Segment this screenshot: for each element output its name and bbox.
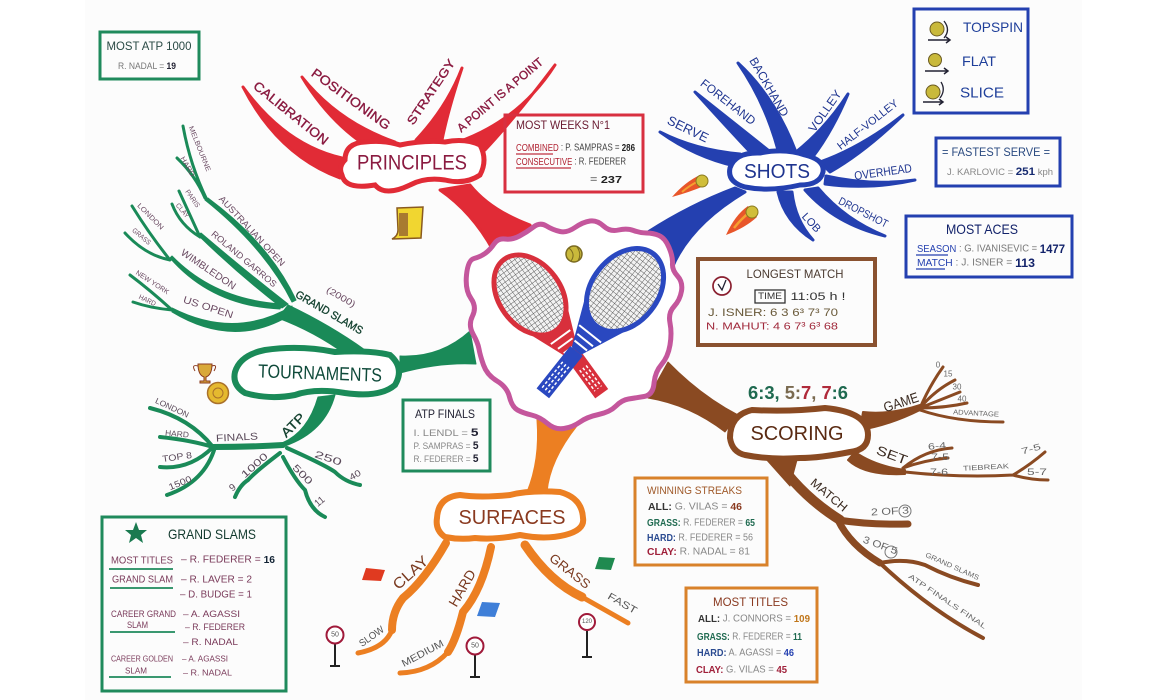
labels: atp branches: 1500 [167, 474, 193, 492]
node: shots: SHOTS [744, 161, 810, 183]
panel: longest match [698, 259, 875, 345]
icon: speed sign 50 medium [466, 638, 484, 677]
labels: surfaces branches: GRASS [546, 550, 594, 592]
labels: scoring branches: 15 [944, 370, 953, 378]
node: surfaces [437, 491, 583, 539]
labels: surfaces branches: HARD [445, 567, 479, 609]
labels: atp branches: 500 [290, 463, 315, 488]
labels: grand slams branches: WIMBLEDON [178, 248, 238, 292]
labels: scoring branches: 2 OF 3 [871, 505, 910, 518]
panel: winning streaks: ALL: G. VILAS = 46 [648, 502, 742, 512]
panel: atp finals: P. SAMPRAS = 5 [414, 440, 478, 452]
panel: winning streaks [635, 478, 767, 565]
green thin branches [125, 126, 360, 517]
panel: most atp 1000 [100, 32, 199, 79]
panel: most aces: MOST ACES [946, 221, 1018, 237]
branch: grass [525, 545, 582, 597]
branch: hard [448, 547, 491, 652]
node: scoring: SCORING [750, 423, 844, 445]
branch: forehand [695, 92, 768, 154]
london and grass [125, 206, 170, 260]
branch: match base [765, 458, 797, 486]
icon: blue racket [517, 233, 679, 414]
labels: grand slams branches: ROLAND GARROS [209, 229, 279, 289]
panel: grand slams: CAREER GOLDEN [111, 654, 173, 664]
melbourne and hard [177, 126, 207, 200]
node: principles: PRINCIPLES [357, 152, 467, 174]
panel: grand slams: – R. NADAL [183, 668, 233, 678]
icon: topspin [928, 21, 950, 43]
panel: grand slams: – R. LAVER = 2 [181, 574, 252, 586]
labels: scoring branches: 5-7 [1027, 467, 1047, 477]
match stem [775, 457, 840, 520]
panel: winning streaks: HARD: R. FEDERER = 56 [647, 532, 753, 544]
branch: serve [660, 132, 740, 166]
icon: gold medal [208, 382, 228, 404]
panel: longest match: TIME [758, 291, 782, 301]
labels: scoring branches: 7-5 [1020, 442, 1042, 456]
labels: scoring branches: 0 [936, 360, 941, 370]
branch: hard tip [400, 652, 448, 673]
trunk: surfaces to center [527, 420, 577, 492]
labels: grand slams branches: PARIS [183, 189, 201, 209]
icon: tennis ball [566, 246, 582, 262]
panel: grand slams: SLAM [125, 666, 147, 676]
branch: clay tip [358, 630, 392, 653]
panel: spin legend: FLAT [962, 53, 996, 69]
panel: most titles: ALL: J. CONNORS = 109 [698, 614, 810, 624]
labels: scoring branches: GAME [881, 389, 921, 415]
branch: us open [172, 306, 292, 332]
finals stem [213, 445, 283, 447]
scoring thin branches [775, 367, 1048, 638]
branch: clay [392, 543, 446, 630]
branch: backhand [738, 63, 796, 152]
branch group: surfaces [358, 420, 628, 673]
panel: winning streaks: WINNING STREAKS [647, 485, 742, 497]
icon: speed sign 120 [579, 614, 595, 657]
labels: shots branches: FOREHAND [698, 76, 759, 128]
new york and hard [130, 275, 172, 310]
branch: roland garros [198, 233, 288, 308]
labels: shots branches: BACKHAND [746, 55, 792, 119]
panel: atp finals: I. LENDL = 5 [414, 427, 478, 439]
labels: shots branches: HALF-VOLLEY [835, 97, 901, 153]
panel: most aces: SEASON : G. IVANISEVIC = 1477 [917, 242, 1065, 256]
2 of 3 [838, 520, 908, 524]
labels: scoring branches: ADVANTAGE [953, 409, 1000, 419]
icon: trophy [194, 364, 216, 383]
icon: speed sign 50 [326, 626, 344, 666]
panel: grand slams: SLAM [127, 620, 148, 630]
panel: most titles: CLAY: G. VILAS = 45 [696, 664, 787, 676]
branch group: principles [243, 65, 555, 250]
labels: grand slams branches: CLAY [174, 202, 190, 220]
panel: longest match: N. MAHUT: 4 6 7³ 6³ 68 [706, 322, 839, 332]
panel: winning streaks: GRASS: R. FEDERER = 65 [647, 518, 755, 528]
labels: grand slams branches: HARD [137, 294, 157, 308]
labels: scoring branches: 3 OF 5 [861, 535, 899, 557]
branch: australian open [205, 198, 296, 302]
trunk: grand slams [278, 305, 365, 354]
labels: scoring branches: 30 [953, 382, 962, 392]
branch: strategy [416, 68, 462, 140]
icon: flaming ball 2 [726, 206, 758, 235]
finals leaves [150, 408, 215, 495]
panel: longest match: 11:05 h ! [790, 291, 846, 303]
branch: positioning [302, 77, 395, 145]
branch: set [848, 452, 905, 474]
panel: most weeks no 1 [505, 115, 643, 192]
labels: grand slams branches: MELBOURNE [187, 125, 211, 173]
labels: grand slams branches: HARD [178, 156, 196, 178]
set leaves [903, 448, 952, 468]
node: principles [341, 141, 484, 191]
labels: scoring branches: SET [874, 442, 910, 468]
panel: most aces: MATCH : J. ISNER = 113 [917, 256, 1035, 270]
labels: grand slams branches: NEW YORK [134, 270, 170, 296]
panel: grand slams: – A. AGASSI [183, 609, 240, 619]
labels: atp branches [154, 396, 363, 509]
labels: atp branches: FINALS [216, 431, 259, 445]
icon: speed sign 120: 120 [582, 619, 593, 625]
panel: most titles [686, 588, 817, 682]
labels: shots branches [665, 55, 913, 235]
panel: grand slams: – D. BUDGE = 1 [180, 590, 252, 600]
labels: scoring branches: GRAND SLAMS [924, 552, 980, 582]
branch: dropshot [805, 188, 885, 236]
labels: scoring branches: TIEBREAK [963, 463, 1010, 473]
branch group: shots [648, 63, 915, 268]
labels: shots branches: SERVE [665, 113, 711, 146]
labels: grand slams branches: (2000) [325, 285, 357, 309]
labels: scoring branches: ATP FINALS FINAL [907, 573, 987, 631]
tiebreak stem [905, 452, 1048, 480]
labels: grand slams branches: LONDON [136, 203, 164, 231]
panel: most weeks no 1: = 237 [590, 174, 623, 186]
panel: most weeks no 1: CONSECUTIVE : R. FEDERER [516, 156, 626, 168]
labels: grand slams branches [130, 125, 365, 337]
labels: atp branches: TOP 8 [161, 450, 193, 464]
labels: surfaces branches: FAST [605, 591, 639, 617]
labels: scoring branches: 40 [958, 394, 967, 404]
game fan [920, 367, 967, 408]
panel: most titles: GRASS: R. FEDERER = 11 [697, 632, 802, 642]
panel: atp finals: R. FEDERER = 5 [414, 453, 479, 465]
trunk: principles to center [440, 185, 530, 250]
icon: slice [923, 82, 943, 105]
panel: grand slams: GRAND SLAM [112, 574, 173, 586]
500 branch [283, 457, 325, 517]
labels: surfaces branches: MEDIUM [400, 638, 446, 670]
branch: overhead [825, 176, 915, 186]
node: surfaces: SURFACES [458, 507, 566, 529]
trunk: atp [282, 395, 335, 446]
icon: flat [925, 54, 948, 74]
branch: game [860, 405, 920, 430]
node: scoring [730, 408, 868, 459]
panel: spin legend: TOPSPIN [963, 19, 1023, 35]
labels: principles branches: POSITIONING [309, 65, 393, 133]
paris and clay [172, 191, 200, 237]
branch: wimbledon [170, 256, 282, 309]
branch: volley [796, 94, 848, 158]
atp finals final leaf [880, 563, 983, 638]
node: tournaments: TOURNAMENTS [258, 361, 382, 387]
icon: star [125, 522, 147, 543]
panel: grand slams: GRAND SLAMS [168, 526, 256, 542]
branch: lob [778, 192, 813, 240]
labels: atp branches: LONDON [154, 396, 190, 420]
panel: grand slams: MOST TITLES [111, 556, 173, 566]
icon: speed sign 50 medium: 50 [471, 642, 479, 650]
panel: most titles: MOST TITLES [713, 595, 788, 609]
panel: grand slams: – R. NADAL [183, 637, 238, 647]
labels: shots branches: OVERHEAD [853, 161, 913, 183]
panel: atp finals [403, 400, 490, 471]
labels: shots branches: VOLLEY [806, 87, 844, 135]
central bubble [466, 221, 682, 429]
grand slams leaf [880, 561, 978, 585]
1000 branch [235, 453, 280, 497]
branch group: scoring [648, 362, 920, 486]
panel: most titles: HARD: A. AGASSI = 46 [697, 648, 794, 658]
labels: atp branches: 9 [227, 482, 239, 494]
panel: grand slams [102, 517, 286, 691]
labels: grand slams branches: GRASS [130, 227, 152, 247]
labels: atp branches: 1000 [239, 451, 271, 481]
panel: longest match: LONGEST MATCH [746, 267, 844, 281]
panel: grand slams: – A. AGASSI [182, 654, 228, 664]
panel: fastest serve: = FASTEST SERVE = [942, 145, 1050, 159]
labels: scoring branches: 7-5 [931, 452, 949, 462]
3 of 5 [838, 520, 880, 563]
panel: most aces [906, 216, 1072, 277]
labels: shots branches: LOB [799, 211, 823, 235]
labels: grand slams branches: US OPEN [182, 295, 234, 321]
icon: speed sign 50: 50 [331, 632, 339, 638]
panel: spin legend: SLICE [960, 84, 1004, 102]
labels: grand slams branches: GRAND SLAMS [293, 289, 365, 337]
icon: green grass flag [595, 557, 615, 570]
branch: calibration [243, 87, 342, 178]
icon: red racket [479, 241, 627, 412]
panel: fastest serve [936, 138, 1060, 186]
labels: surfaces branches: SLOW [357, 624, 387, 650]
icon: blue hard flag [477, 602, 500, 617]
panel: atp finals: ATP FINALS [415, 407, 475, 421]
trunk: scoring to center [648, 362, 738, 432]
labels: scoring branches [808, 360, 1047, 631]
labels: scoring branches: 6-4 [928, 440, 946, 452]
labels: scoring branches: 7-6 [930, 467, 948, 477]
labels: atp branches: 40 [347, 468, 363, 482]
panel: spin legend [914, 9, 1028, 113]
icon: scroll [392, 207, 423, 239]
labels: principles branches [251, 55, 546, 148]
labels: atp branches: ATP [278, 410, 308, 440]
panel: most atp 1000: MOST ATP 1000 [106, 39, 192, 53]
labels: grand slams branches: AUSTRALIAN OPEN [217, 194, 287, 268]
icon: flaming ball 1 [672, 175, 708, 197]
labels: principles branches: A POINT IS A POINT [454, 55, 546, 135]
labels: principles branches: STRATEGY [404, 57, 458, 127]
labels: scoring branches: MATCH [808, 475, 850, 515]
panel: grand slams: CAREER GRAND [111, 609, 176, 619]
panel: most weeks no 1: MOST WEEKS N°1 [516, 118, 610, 132]
labels: atp branches: HARD [165, 428, 190, 440]
branch: half-volley [820, 115, 903, 172]
labels: atp branches: 250 [313, 449, 344, 469]
trunk: tournaments to center [400, 331, 476, 373]
node: shots [730, 151, 823, 189]
labels: principles branches: CALIBRATION [251, 78, 331, 148]
labels: surfaces branches: CLAY [390, 553, 432, 593]
panel: grand slams: – R. FEDERER = 16 [181, 554, 275, 566]
panel: most atp 1000: R. NADAL = 19 [118, 61, 176, 71]
icon: clock [713, 277, 731, 295]
labels: atp branches: 11 [313, 494, 328, 509]
advantage [920, 410, 1003, 422]
branch group: tournaments [170, 198, 476, 446]
panel: winning streaks: CLAY: R. NADAL = 81 [647, 546, 750, 558]
250 branch [287, 448, 360, 485]
panel: grand slams: – R. FEDERER [185, 622, 245, 632]
branch: a point is a point [458, 65, 555, 150]
trunk: shots to center [648, 188, 745, 268]
icon: red clay flag [362, 568, 385, 581]
labels: surfaces branches [357, 550, 639, 670]
panel: longest match: J. ISNER: 6 3 6³ 7³ 70 [708, 307, 838, 319]
node: tournaments [234, 348, 399, 397]
scoring example: 6:3, 5:7, 7:6 [748, 383, 848, 403]
panel: most weeks no 1: COMBINED : P. SAMPRAS = 286 [516, 142, 635, 154]
branch: grass tip [582, 597, 628, 623]
panel: fastest serve: J. KARLOVIC = 251 kph [947, 166, 1053, 178]
labels: shots branches: DROPSHOT [836, 195, 890, 231]
